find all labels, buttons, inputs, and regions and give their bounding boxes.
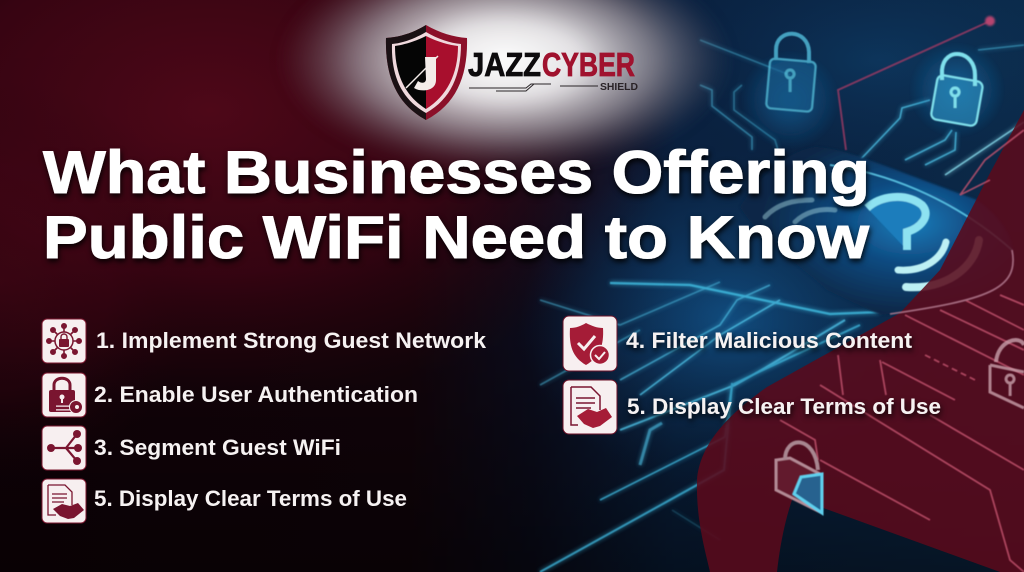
title: Public WiFi Need to Know [43, 204, 869, 271]
icon: shield [386, 25, 467, 120]
icon: document and handshake [563, 380, 617, 434]
central lock chip [740, 147, 1014, 315]
item 4 [42, 479, 407, 523]
logo wordmark: JAZZ [468, 46, 541, 83]
label: 2. Enable User Authentication [94, 382, 418, 407]
label: 3. Segment Guest WiFi [94, 435, 341, 460]
item 3 [42, 426, 341, 470]
red overlay shape [697, 110, 1024, 572]
icon: padlock and key [42, 373, 86, 417]
pink circuit line [838, 22, 988, 150]
icon: glowing lock [867, 197, 926, 250]
icon: lock right edge [990, 340, 1024, 408]
icon: shield with checks [563, 316, 617, 371]
icon: lock top right [909, 42, 1005, 138]
icon: wifi arcs [765, 200, 979, 287]
logo subtitle: SHIELD [600, 82, 638, 93]
item 2 [42, 373, 418, 417]
red circuit lines [780, 130, 1024, 572]
logo [386, 25, 638, 120]
item 1 [42, 319, 487, 363]
label: 5. Display Clear Terms of Use [627, 394, 941, 419]
title [43, 139, 870, 271]
label: 4. Filter Malicious Content [626, 328, 913, 353]
logo glow [280, 0, 730, 172]
pink node [985, 16, 995, 26]
title: What Businesses Offering [43, 139, 870, 206]
icon: lock top centre [740, 34, 840, 150]
icon: lock bottom, half red half blue [776, 442, 822, 513]
icon: network lock [42, 319, 86, 363]
item 6 [563, 380, 941, 434]
item 5 [563, 316, 913, 371]
logo circuit line [469, 84, 598, 91]
label: 5. Display Clear Terms of Use [94, 486, 407, 511]
icon: document and handshake [42, 479, 86, 523]
logo: CYBER [542, 46, 635, 83]
icon: network branch [42, 426, 86, 470]
label: 1. Implement Strong Guest Network [96, 328, 487, 353]
circuit board lines [540, 40, 1024, 572]
